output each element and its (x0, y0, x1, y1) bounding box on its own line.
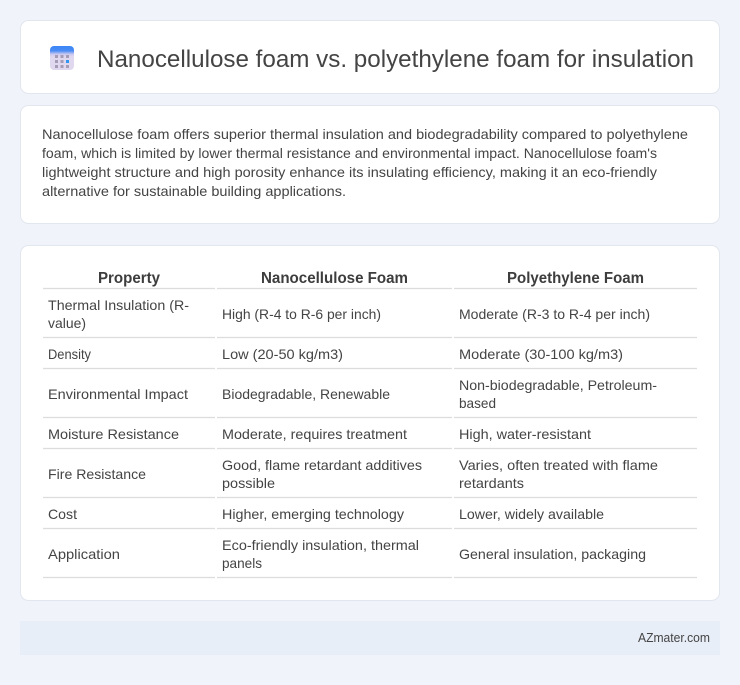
footer credit: AZmater.com (638, 631, 710, 645)
row: environmental impact: Biodegradable, Renewable (222, 386, 390, 402)
panel: summary text: Nanocellulose foam offers superior thermal insulation and biodegradability compared to polyethylene (42, 126, 688, 142)
row: environmental impact: Environmental Impact (48, 386, 188, 402)
row: environmental impact: based (459, 395, 496, 411)
icon: calendar (50, 46, 74, 70)
row: application: panels (222, 555, 262, 571)
title: Nanocellulose foam vs. polyethylene foam for insulation (97, 46, 694, 73)
row: application (43, 537, 697, 578)
row: moisture resistance: High, water-resistant (459, 426, 591, 442)
table header (43, 270, 697, 288)
panel: summary text: alternative for sustainable building applications. (42, 183, 346, 199)
row: fire resistance: Fire Resistance (48, 466, 146, 482)
row: density: Low (20-50 kg/m3) (222, 346, 343, 362)
row: environmental impact: Non-biodegradable, Petroleum- (459, 377, 657, 393)
row: thermal insulation: value) (48, 315, 86, 331)
row: fire resistance: Good, flame retardant additives (222, 457, 422, 473)
row: thermal insulation: Thermal Insulation (R- (48, 297, 189, 313)
row: moisture resistance: Moderate, requires treatment (222, 426, 407, 442)
panel: header (20, 20, 720, 94)
row: thermal insulation: Moderate (R-3 to R-4 per inch) (459, 306, 650, 322)
table header: Nanocellulose Foam (261, 270, 408, 287)
panel: comparison table (20, 246, 720, 600)
row: application: General insulation, packaging (459, 546, 646, 562)
panel: summary text: foam, which is limited by lower thermal resistance and environmental impact. Nanocellulose foam's (42, 145, 657, 161)
row: application: Application (48, 546, 120, 562)
row: fire resistance: retardants (459, 475, 524, 491)
row: fire resistance: Varies, often treated with flame (459, 457, 658, 473)
row: thermal insulation (43, 297, 697, 338)
footer bar (20, 621, 720, 655)
row: density: Moderate (30-100 kg/m3) (459, 346, 623, 362)
row: density (43, 346, 697, 368)
row: density: Density (48, 346, 91, 362)
row: cost: Cost (48, 506, 77, 522)
row: fire resistance (43, 457, 697, 498)
row: thermal insulation: High (R-4 to R-6 per inch) (222, 306, 381, 322)
row: cost (43, 506, 697, 528)
panel: summary text: lightweight structure and high porosity enhance its insulating efficiency, making it an eco-friendly (42, 164, 657, 180)
row: moisture resistance (43, 426, 697, 448)
row: application: Eco-friendly insulation, thermal (222, 537, 419, 553)
row: cost: Higher, emerging technology (222, 506, 404, 522)
row: cost: Lower, widely available (459, 506, 604, 522)
row: moisture resistance: Moisture Resistance (48, 426, 179, 442)
table header: Property (98, 270, 160, 287)
row: environmental impact (43, 377, 697, 418)
table header: Polyethylene Foam (507, 270, 644, 287)
row: fire resistance: possible (222, 475, 275, 491)
panel: summary text (20, 106, 720, 224)
